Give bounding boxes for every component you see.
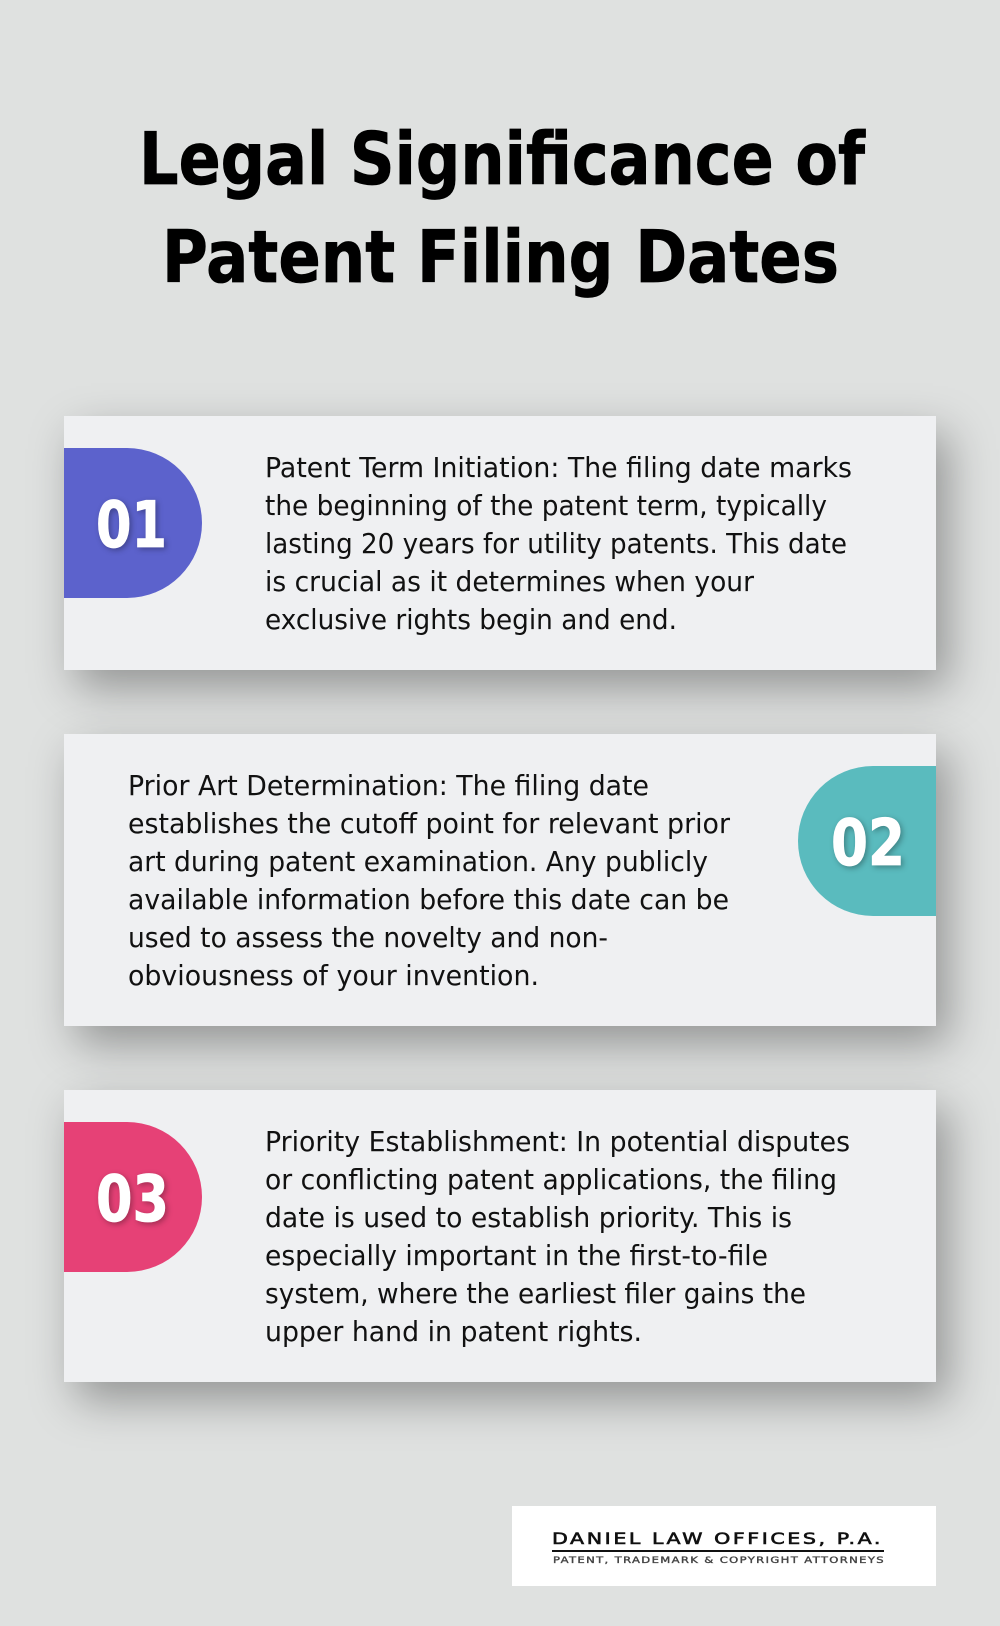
text block 1 — [265, 452, 852, 636]
badge 01 — [64, 448, 202, 598]
title: Legal Significance of — [139, 117, 866, 201]
text block 3: especially important in the first-to-file — [265, 1240, 768, 1272]
text block 3: system, where the earliest filer gains the — [265, 1278, 806, 1310]
text block 3 — [265, 1126, 850, 1348]
text block 2: establishes the cutoff point for relevant prior — [128, 808, 731, 840]
logo: Daniel Law Offices — [512, 1506, 936, 1586]
text block 3: Priority Establishment: In potential disputes — [265, 1126, 850, 1158]
text block 2 — [128, 770, 731, 992]
text block 2: obviousness of your invention. — [128, 960, 539, 992]
badge 02 — [798, 766, 936, 916]
text block 3: upper hand in patent rights. — [265, 1316, 642, 1348]
text block 2: used to assess the novelty and non- — [128, 922, 608, 954]
text block 1: Patent Term Initiation: The filing date marks — [265, 452, 852, 484]
panel: patent term initiation — [64, 416, 936, 670]
text block 1: is crucial as it determines when your — [265, 566, 755, 598]
text block 1: the beginning of the patent term, typically — [265, 490, 827, 522]
text block 2: available information before this date can be — [128, 884, 729, 916]
title: Patent Filing Dates — [162, 215, 839, 299]
badge 03 — [64, 1122, 202, 1272]
badge 01: 01 — [96, 489, 167, 563]
title — [139, 117, 866, 299]
text block 3: or conflicting patent applications, the filing — [265, 1164, 837, 1196]
text block 2: Prior Art Determination: The filing date — [128, 770, 649, 802]
logo: Daniel Law Offices: DANIEL LAW OFFICES, P.A. — [552, 1529, 883, 1548]
text block 2: art during patent examination. Any publicly — [128, 846, 708, 878]
badge 03: 03 — [96, 1163, 169, 1237]
text block 1: exclusive rights begin and end. — [265, 604, 677, 636]
text block 3: date is used to establish priority. This is — [265, 1202, 792, 1234]
logo: Daniel Law Offices: PATENT, TRADEMARK & COPYRIGHT ATTORNEYS — [553, 1556, 885, 1566]
text block 1: lasting 20 years for utility patents. This date — [265, 528, 847, 560]
panel: priority establishment — [64, 1090, 936, 1382]
panel: prior art determination — [64, 734, 936, 1026]
badge 02: 02 — [831, 807, 905, 881]
